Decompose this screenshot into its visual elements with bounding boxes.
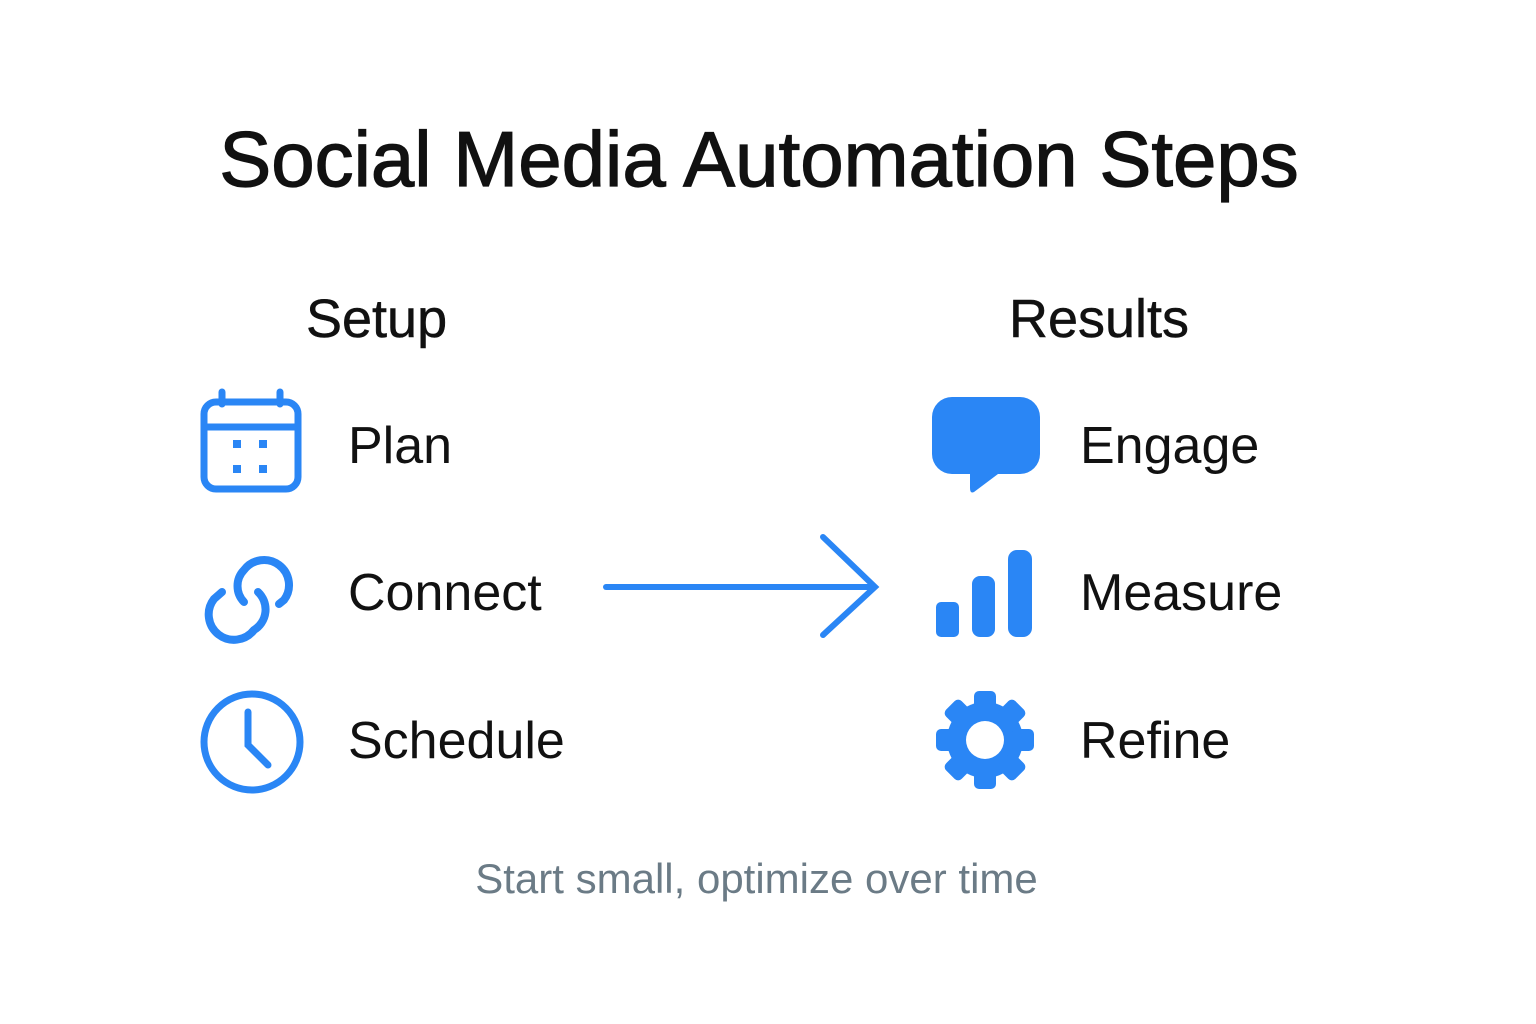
label: plan: Plan bbox=[348, 417, 452, 475]
icon: bar chart bbox=[936, 550, 1032, 637]
label: schedule: Schedule bbox=[348, 712, 565, 770]
icon: speech bubble bbox=[932, 397, 1040, 492]
label: connect: Connect bbox=[348, 564, 542, 622]
title: Social Media Automation Steps bbox=[219, 115, 1299, 203]
label: refine: Refine bbox=[1080, 712, 1230, 770]
icon: gear bbox=[936, 691, 1034, 789]
label: engage: Engage bbox=[1080, 417, 1259, 475]
subtitle: Start small, optimize over time bbox=[475, 855, 1038, 902]
icon: calendar bbox=[204, 392, 298, 489]
icon: link bbox=[209, 560, 289, 640]
heading: setup: Setup bbox=[306, 289, 447, 349]
label: measure: Measure bbox=[1080, 564, 1282, 622]
icon: clock bbox=[204, 694, 300, 790]
arrow bbox=[606, 537, 875, 635]
heading: results: Results bbox=[1009, 289, 1189, 349]
